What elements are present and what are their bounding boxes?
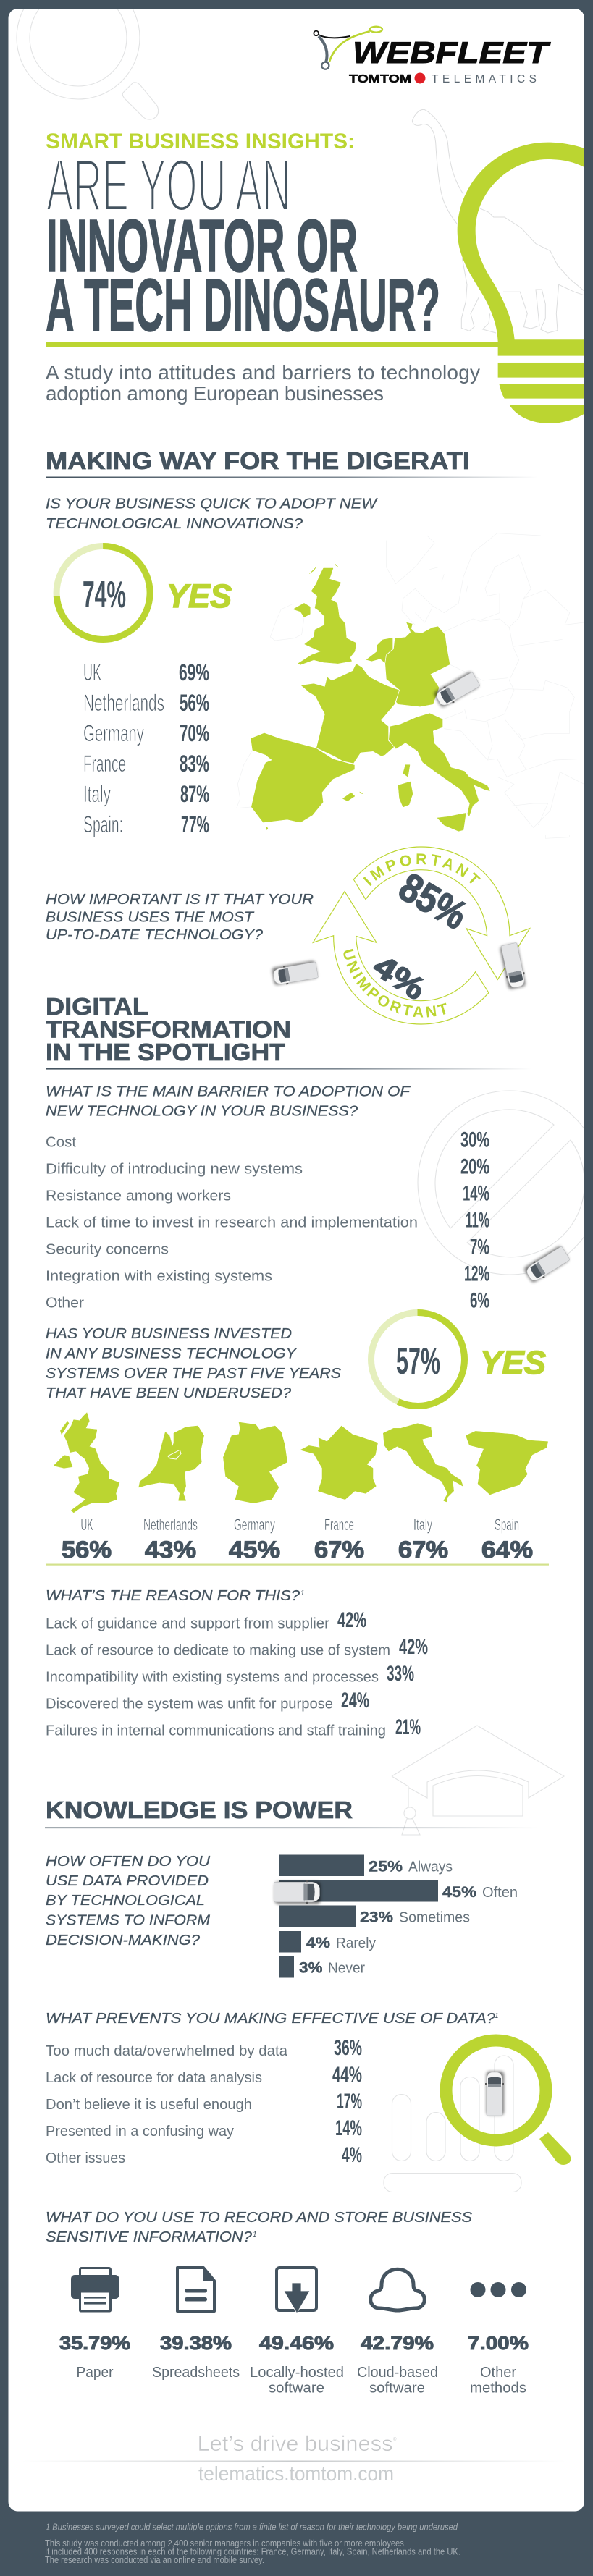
table: adoption by country: Italy — [83, 781, 111, 807]
country labels and values: 64% — [481, 1537, 533, 1563]
table: adoption by country: Spain: — [83, 811, 123, 837]
question: quick to adopt: IS YOUR BUSINESS QUICK TO ADOPT NEW — [46, 497, 378, 512]
header — [17, 0, 586, 423]
list: barriers: Security concerns — [46, 1242, 169, 1258]
list: data obstacles: Lack of resource for data analysis — [46, 2070, 262, 2086]
list: data obstacles: 44% — [332, 2063, 362, 2087]
footnotes — [45, 2522, 460, 2565]
icon: download tablet — [277, 2268, 316, 2313]
list: reasons: Discovered the system was unfit for purpose — [46, 1697, 333, 1713]
icon: cloud — [371, 2269, 424, 2310]
question: quick to adopt — [46, 497, 378, 532]
list: barriers: Lack of time to invest in research and implementation — [46, 1215, 418, 1230]
map: uk small — [54, 1413, 119, 1513]
icon: printer — [71, 2268, 119, 2311]
icon: magnifier — [446, 2040, 571, 2165]
ring chart: 74% yes: YES — [167, 578, 232, 615]
cycle arrows: important vs unimportant — [312, 846, 531, 1025]
icon: van by barriers — [523, 1245, 571, 1284]
list: data obstacles: Don’t believe it is useful enough — [46, 2097, 252, 2113]
list: barriers: 7% — [470, 1235, 489, 1259]
map: germany small — [223, 1422, 287, 1503]
question: how often: BY TECHNOLOGICAL — [46, 1893, 205, 1909]
list: reasons: Lack of guidance and support from supplier — [46, 1616, 329, 1631]
label: important: IMPORTANT — [363, 853, 481, 886]
question: what prevents: 1 — [495, 2012, 499, 2020]
logo: Webfleet TomTom Telematics — [314, 27, 551, 85]
list: barriers: Integration with existing systems — [46, 1268, 272, 1284]
list: barriers: Cost — [46, 1135, 76, 1151]
table: adoption by country: UK — [83, 659, 101, 685]
list: reasons: 42% — [399, 1635, 428, 1659]
question: reason: 1 — [300, 1589, 305, 1597]
list: data obstacles: Other issues — [46, 2150, 125, 2166]
subtitle: adoption among European businesses — [46, 382, 384, 405]
question: reason: WHAT’S THE REASON FOR THIS? — [46, 1588, 300, 1604]
icon: prohibition sign outline — [418, 1091, 593, 1275]
country labels and values: Netherlands — [143, 1516, 198, 1534]
heading: digital transformation: TRANSFORMATION — [46, 1016, 291, 1044]
icon: spreadsheet — [177, 2268, 214, 2311]
bar chart: data usage frequency: 4% — [306, 1935, 330, 1951]
footnotes: 1 Businesses surveyed could select multiple options from a finite list of reason for their technology being underused — [46, 2522, 458, 2532]
question: how important: HOW IMPORTANT IS IT THAT YOUR — [46, 892, 314, 908]
tagline: ® — [393, 2437, 397, 2442]
bar chart: data usage frequency: 23% — [360, 1909, 393, 1925]
map: uk — [298, 568, 356, 664]
question: how important — [46, 892, 314, 943]
table: adoption by country: 56% — [180, 690, 209, 716]
storage stats: Paper — [77, 2365, 114, 2381]
storage stats: Spreadsheets — [152, 2365, 240, 2381]
ring chart: 74% yes: 74% — [83, 574, 126, 616]
list: barriers — [46, 1128, 489, 1313]
arrow: unimportant — [313, 892, 489, 1024]
country labels and values: 45% — [229, 1537, 280, 1563]
list: barriers: Other — [46, 1296, 84, 1312]
map: italy — [389, 713, 490, 816]
list: data obstacles: 4% — [342, 2143, 362, 2167]
country labels and values: Spain — [495, 1516, 519, 1534]
list: reasons: 42% — [337, 1608, 366, 1632]
bar chart: data usage frequency: Never — [328, 1960, 365, 1976]
map: netherlands — [366, 638, 393, 664]
question: record and store: WHAT DO YOU USE TO RECORD AND STORE BUSINESS — [46, 2210, 473, 2226]
table: adoption by country: 87% — [180, 781, 209, 807]
question: how important: UP-TO-DATE TECHNOLOGY? — [46, 927, 264, 943]
list: reasons: Failures in internal communications and staff training — [46, 1723, 386, 1739]
list: reasons: Incompatibility with existing systems and processes — [46, 1669, 379, 1685]
country labels and values: Italy — [413, 1516, 432, 1534]
list: reasons: 24% — [341, 1689, 369, 1713]
question: how often: SYSTEMS TO INFORM — [46, 1912, 210, 1928]
map: france — [300, 664, 400, 764]
country labels and values: 67% — [314, 1537, 364, 1563]
heading: knowledge is power: KNOWLEDGE IS POWER — [46, 1797, 353, 1824]
logo wordmark: WEBFLEET — [353, 35, 551, 69]
icon: three dots — [471, 2282, 526, 2297]
list: barriers: 12% — [464, 1262, 489, 1285]
question: underused systems: IN ANY BUSINESS TECHNOLOGY — [46, 1346, 298, 1362]
question: record and store: SENSITIVE INFORMATION? — [46, 2229, 253, 2245]
footnotes: It included 400 responses in each of the following countries: France, Germany, Italy, Spain, Netherlands and the UK. — [45, 2546, 460, 2556]
icon: van on map — [433, 671, 481, 709]
list: reasons: 33% — [387, 1662, 414, 1686]
ring chart: 57% yes: 57% — [396, 1340, 440, 1382]
storage stats: 7.00% — [468, 2332, 529, 2354]
list: reasons: Lack of resource to dedicate to making use of system — [46, 1643, 390, 1659]
bar chart: data usage frequency: 25% — [369, 1859, 403, 1875]
storage stats: Locally-hosted — [250, 2365, 344, 2381]
icon: van in magnifier — [485, 2072, 504, 2116]
icon: logo mark — [314, 27, 382, 69]
icon: TomTom hands — [414, 72, 426, 84]
question: main barrier — [46, 1084, 411, 1119]
list: barriers: 14% — [463, 1181, 489, 1206]
list: data obstacles: 36% — [334, 2036, 362, 2060]
country labels and values: 67% — [398, 1537, 448, 1563]
table: adoption by country: Germany — [83, 720, 144, 746]
label: unimportant: UNIMPORTANT — [343, 948, 446, 1018]
country labels and values: Germany — [234, 1516, 275, 1534]
table: adoption by country: 70% — [180, 720, 209, 746]
question: underused systems: HAS YOUR BUSINESS INVESTED — [46, 1326, 292, 1342]
storage stats: 49.46% — [259, 2332, 334, 2354]
storage stats: 39.38% — [160, 2332, 232, 2354]
bar chart: data usage frequency: Sometimes — [399, 1909, 470, 1925]
country maps row — [54, 1413, 548, 1513]
ring chart: 57% yes — [371, 1313, 546, 1406]
bar chart: data usage frequency — [279, 1854, 518, 1977]
bar chart: data usage frequency: Always — [408, 1859, 453, 1875]
question: main barrier: WHAT IS THE MAIN BARRIER TO ADOPTION OF — [46, 1084, 411, 1100]
icon: magnifier outline — [17, 0, 159, 119]
title line 1: ARE YOU AN — [46, 144, 291, 227]
country labels and values: 43% — [145, 1537, 196, 1563]
question: underused systems: THAT HAVE BEEN UNDERUSED? — [46, 1385, 292, 1401]
storage stats: Cloud-based — [357, 2365, 438, 2381]
stat: 85%: 85% — [392, 864, 475, 938]
list: barriers: 6% — [470, 1288, 489, 1313]
table: adoption by country: 77% — [181, 811, 209, 837]
list: data obstacles: Presented in a confusing way — [46, 2124, 234, 2140]
footnotes: This study was conducted among 2,400 senior managers in companies with five or more employees. — [45, 2538, 406, 2548]
storage stats: Other — [480, 2365, 516, 2381]
map: europe — [237, 533, 584, 838]
list: reasons — [46, 1608, 428, 1739]
storage stats: software — [369, 2380, 425, 2396]
logo Telematics: TELEMATICS — [432, 73, 537, 85]
question: record and store — [46, 2210, 473, 2245]
icon: van right of arrows — [500, 942, 527, 989]
question: record and store: 1 — [253, 2231, 257, 2239]
question: how important: BUSINESS USES THE MOST — [46, 909, 255, 925]
question: main barrier: NEW TECHNOLOGY IN YOUR BUSINESS? — [46, 1103, 358, 1119]
country labels and values — [62, 1516, 533, 1563]
map: italy small — [383, 1424, 463, 1502]
question: how often: HOW OFTEN DO YOU — [46, 1854, 211, 1870]
list: barriers: Resistance among workers — [46, 1188, 231, 1204]
website: telematics.tomtom.com — [198, 2462, 394, 2485]
list: data obstacles: 17% — [337, 2090, 362, 2113]
list: barriers: 20% — [460, 1155, 489, 1178]
list: data obstacles — [46, 2036, 362, 2167]
question: quick to adopt: TECHNOLOGICAL INNOVATIONS? — [46, 516, 303, 532]
country labels and values: France — [324, 1516, 354, 1534]
question: how often — [46, 1854, 211, 1948]
map: netherlands small — [139, 1426, 204, 1500]
ring chart: 57% yes: YES — [480, 1344, 546, 1381]
storage stats: software — [269, 2380, 324, 2396]
heading: digital transformation: IN THE SPOTLIGHT — [46, 1039, 286, 1066]
question: how often: DECISION-MAKING? — [46, 1933, 201, 1948]
kicker: SMART BUSINESS INSIGHTS: — [46, 130, 355, 153]
bar chart: data usage frequency: 45% — [442, 1884, 476, 1901]
list: barriers: 11% — [466, 1209, 489, 1232]
bar chart: data usage frequency: Rarely — [336, 1935, 376, 1951]
table: adoption by country — [83, 659, 209, 837]
subtitle — [46, 361, 480, 405]
storage stats: methods — [470, 2380, 526, 2396]
country labels and values: 56% — [62, 1537, 112, 1563]
list: data obstacles: 14% — [335, 2116, 362, 2140]
question: how often: USE DATA PROVIDED — [46, 1873, 209, 1889]
list: data obstacles: Too much data/overwhelmed by data — [46, 2043, 288, 2059]
table: adoption by country: Netherlands — [83, 690, 164, 716]
storage stats — [59, 2332, 529, 2396]
table: adoption by country: France — [83, 751, 126, 777]
heading: digital transformation: DIGITAL — [46, 994, 148, 1021]
subtitle: A study into attitudes and barriers to technology — [46, 361, 480, 384]
arrow: important — [353, 847, 530, 979]
ring chart: 74% yes — [56, 546, 232, 640]
storage stats: 35.79% — [59, 2332, 130, 2354]
question: underused systems: SYSTEMS OVER THE PAST FIVE YEARS — [46, 1366, 342, 1382]
icon: van on bar — [274, 1880, 321, 1904]
icon: light bulb — [458, 143, 586, 423]
map: germany — [385, 622, 450, 707]
stat: 4%: 4% — [367, 948, 432, 1007]
list: reasons: 21% — [395, 1715, 421, 1739]
chart icon: bars under magnifier — [384, 2056, 521, 2192]
footnotes: The research was conducted via an online and mobile survey. — [45, 2555, 264, 2565]
heading: digital transformation — [46, 994, 291, 1066]
storage stats: 42.79% — [361, 2332, 434, 2354]
map: islands — [266, 564, 466, 831]
question: what prevents: WHAT PREVENTS YOU MAKING EFFECTIVE USE OF DATA? — [46, 2011, 496, 2027]
heading: making way for the digerati: MAKING WAY FOR THE DIGERATI — [46, 448, 470, 475]
bar chart: data usage frequency: 3% — [299, 1960, 323, 1976]
icon: graduation cap outline — [392, 1726, 564, 1835]
title rule — [46, 342, 499, 347]
bar chart: data usage frequency: Often — [482, 1885, 518, 1901]
table: adoption by country: 83% — [180, 751, 209, 777]
question: underused systems — [46, 1326, 342, 1401]
map: spain — [251, 732, 355, 823]
logo TomTom: TOMTOM — [349, 73, 411, 85]
map: france small — [300, 1426, 378, 1500]
table: adoption by country: 69% — [179, 659, 209, 685]
list: barriers: Difficulty of introducing new systems — [46, 1161, 303, 1177]
icon: dinosaur outline — [412, 109, 585, 333]
country labels and values: UK — [81, 1516, 93, 1534]
list: barriers: 30% — [460, 1128, 489, 1152]
map: spain small — [466, 1431, 548, 1495]
icon: van left of arrows — [272, 960, 319, 987]
title block — [46, 130, 440, 347]
tagline: Let’s drive business — [197, 2432, 392, 2456]
